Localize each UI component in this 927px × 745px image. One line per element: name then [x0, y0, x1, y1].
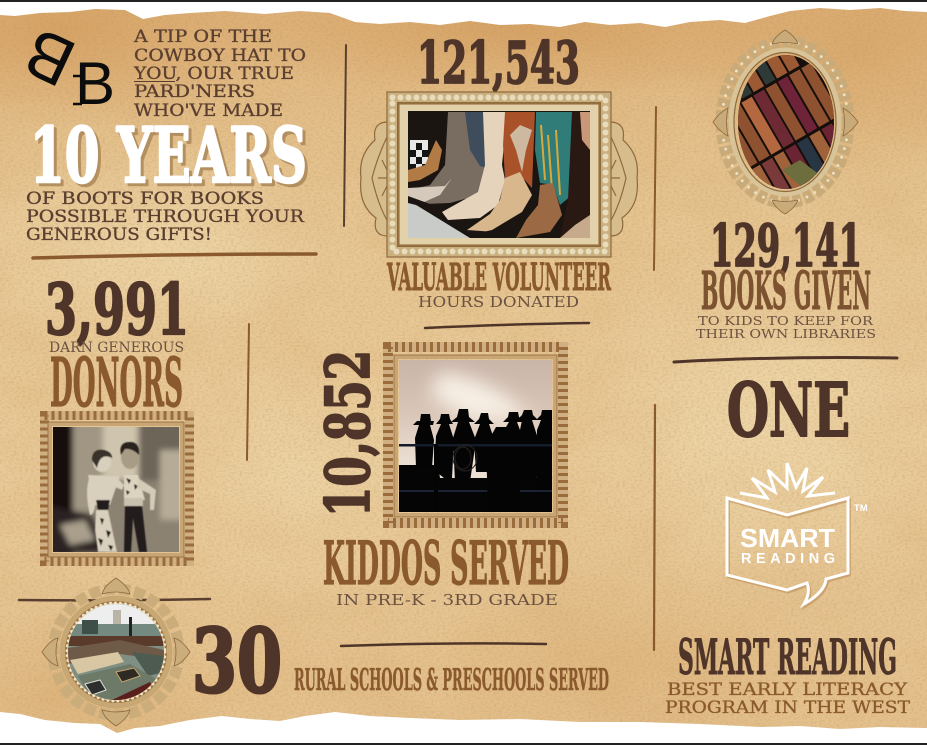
frame ornament [361, 92, 637, 257]
round frame [42, 578, 190, 726]
program description: BEST EARLY LITERACY [667, 680, 908, 700]
logo: BB monogram: B [13, 13, 86, 101]
torn top edge [0, 0, 927, 27]
intro text: A TIP OF THE [133, 27, 272, 47]
text: VALUABLE VOLUNTEER [387, 255, 611, 299]
photo [738, 55, 834, 189]
filigree frame [44, 416, 190, 562]
intro text: WHO'VE MADE [134, 101, 283, 121]
program description [665, 680, 911, 718]
logo: smart reading: READING [741, 551, 835, 567]
logo: smart reading: TM [854, 503, 868, 514]
photo [399, 360, 552, 512]
photo [53, 427, 179, 552]
stat: schools number: 30 [192, 609, 282, 713]
program description: PROGRAM IN THE WEST [665, 698, 911, 718]
logo: smart reading [727, 463, 868, 606]
stat: kiddos number: 10,852 [313, 350, 384, 517]
stat sublabel: hours donated: HOURS DONATED [418, 293, 579, 311]
intro text continued: GENEROUS GIFTS! [26, 225, 212, 245]
framed photo: old books [712, 30, 858, 214]
filigree frame [388, 347, 563, 523]
intro text continued [26, 189, 305, 245]
headline: 10 years [30, 111, 310, 203]
framed photo: cowboys at sunset [388, 347, 563, 523]
intro text: PARD'NERS [134, 82, 255, 102]
intro text [133, 27, 306, 121]
photo [68, 604, 164, 700]
torn bottom edge [0, 712, 927, 745]
text: KIDDOS SERVED [323, 529, 569, 599]
stat sublabel: to kids: TO KIDS TO KEEP FOR [698, 313, 874, 328]
stat sublabel: darn generous: DARN GENEROUS [49, 340, 184, 356]
stat sublabel: grade range: IN PRE-K - 3RD GRADE [336, 591, 558, 609]
stat: donors number: 3,991 [45, 268, 189, 351]
stat: volunteer hours number: 121,543 [417, 29, 580, 97]
headline: 10 years: 10 YEARS [33, 114, 310, 203]
text: DONORS [50, 343, 183, 422]
stat sublabel: to kids: THEIR OWN LIBRARIES [696, 326, 876, 341]
stat sublabel: to kids [696, 313, 876, 341]
intro text: YOU, OUR TRUE [133, 64, 294, 84]
oval frame [713, 30, 858, 214]
intro text continued: OF BOOTS FOR BOOKS [26, 189, 264, 209]
intro text continued: POSSIBLE THROUGH YOUR [26, 207, 305, 227]
logo: smart reading: SMART [740, 523, 835, 553]
stat: one: ONE [727, 368, 850, 454]
headline: 10 years: 10 YEARS [30, 111, 307, 200]
framed photo: toy couple [44, 416, 190, 562]
framed photo: cowboy boots [361, 92, 637, 257]
logo: BB monogram: B [75, 50, 115, 117]
framed photo: classroom [42, 578, 190, 726]
logo: BB monogram [13, 13, 115, 117]
intro text: COWBOY HAT TO [134, 46, 306, 66]
photo [408, 111, 590, 238]
